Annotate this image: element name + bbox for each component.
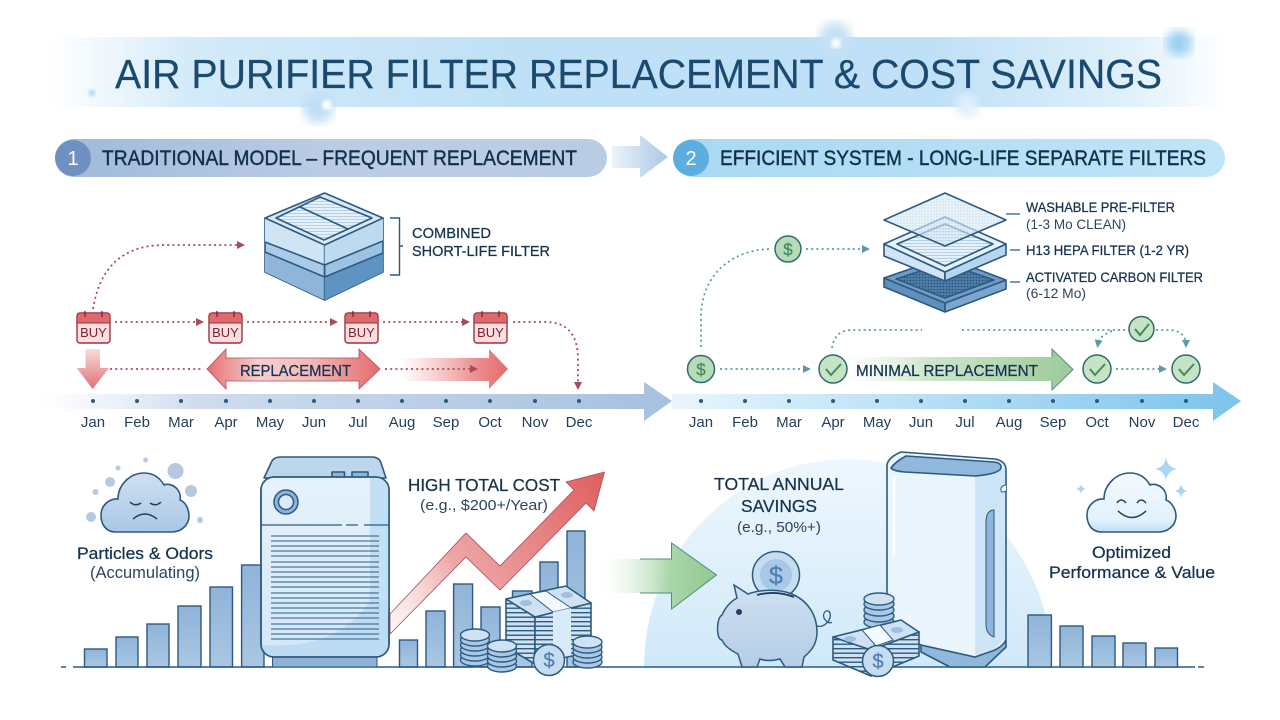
- arrow: down red: [77, 349, 109, 389]
- bar chart: falling cost: [1028, 615, 1178, 667]
- arrow: rising total cost: [390, 472, 604, 634]
- efficient timeline: Nov: [1129, 414, 1156, 431]
- traditional timeline: Feb: [124, 414, 150, 431]
- calendar: buy January: [77, 311, 110, 343]
- traditional timeline: Nov: [522, 414, 549, 431]
- bar chart: rising cost: [400, 531, 585, 667]
- efficient timeline: Feb: [732, 414, 758, 431]
- icon: piggy bank with coin: $: [769, 562, 783, 590]
- arrow: green to savings: [603, 543, 716, 609]
- arrow between headers: [612, 135, 668, 178]
- icon: coin stack and cash small: [833, 593, 919, 676]
- bar chart: rising particles: [84, 565, 264, 667]
- efficient timeline: Jun: [909, 414, 933, 431]
- text: high total cost: HIGH TOTAL COST: [408, 475, 560, 495]
- text: high total cost: [408, 475, 560, 514]
- text: total annual savings: SAVINGS: [741, 496, 817, 516]
- traditional timeline: May: [256, 414, 285, 431]
- icon: separate filter stack: [884, 193, 1006, 312]
- filter layer labels: WASHABLE PRE-FILTER: [1026, 199, 1175, 215]
- traditional timeline: Jan: [81, 414, 105, 431]
- icon: check December: [1172, 355, 1200, 383]
- header: traditional model: 1: [67, 148, 79, 170]
- calendar: buy January: BUY: [80, 325, 107, 340]
- arrow: minimal replacement: [845, 349, 1073, 390]
- arrow: replacement double: [207, 349, 380, 389]
- efficient timeline: Mar: [776, 414, 802, 431]
- efficient timeline: Jan: [689, 414, 713, 431]
- efficient timeline: May: [863, 414, 892, 431]
- icon: modern air purifier: [887, 452, 1006, 667]
- efficient timeline: Aug: [996, 414, 1022, 431]
- calendar: buy October: BUY: [477, 325, 504, 340]
- text: total annual savings: [714, 474, 844, 536]
- title banner: AIR PURIFIER FILTER REPLACEMENT & COST SAVINGS: [115, 51, 1162, 97]
- efficient timeline: Sep: [1040, 414, 1066, 431]
- header: efficient system: [673, 139, 1225, 177]
- text: optimized performance and value: [1049, 543, 1215, 582]
- arrow: fading replacement: [385, 349, 508, 389]
- efficient timeline: Apr: [821, 414, 845, 431]
- efficient timeline: Jul: [955, 414, 975, 431]
- icon: dollar coin large: $: [543, 650, 555, 672]
- arrow: minimal replacement: MINIMAL REPLACEMENT: [856, 363, 1038, 380]
- text: particles and odors: [77, 545, 213, 582]
- traditional timeline: [40, 382, 672, 431]
- icon: sad cloud with particles: [86, 458, 203, 532]
- calendar: buy April: BUY: [212, 325, 239, 340]
- icon: dollar coin large: [534, 644, 564, 676]
- text: total annual savings: TOTAL ANNUAL: [714, 474, 844, 494]
- icon: check October: [1083, 355, 1111, 383]
- traditional timeline: Aug: [389, 414, 415, 431]
- icon: coin stacks: [460, 629, 602, 672]
- icon: check April: [819, 355, 847, 383]
- traditional timeline: Dec: [566, 414, 593, 431]
- icon: piggy bank with coin: [718, 552, 832, 667]
- bracket and label: combined short-life filter: COMBINED: [412, 225, 491, 242]
- icon: happy cloud with sparkles: [1076, 457, 1187, 532]
- icon: dollar coin upper: [775, 236, 801, 262]
- header: efficient system: EFFICIENT SYSTEM - LONG-LIFE SEPARATE FILTERS: [720, 147, 1206, 170]
- header: traditional model: TRADITIONAL MODEL – FREQUENT REPLACEMENT: [102, 147, 577, 170]
- traditional timeline: Oct: [478, 414, 502, 431]
- filter layer labels: ACTIVATED CARBON FILTER: [1026, 269, 1203, 285]
- bracket and label: combined short-life filter: SHORT-LIFE FILTER: [412, 243, 550, 260]
- calendar: buy October: [474, 311, 507, 343]
- text: high total cost: (e.g., $200+/Year): [420, 497, 548, 514]
- traditional timeline: Apr: [214, 414, 238, 431]
- baseline axis: [61, 666, 1204, 668]
- efficient timeline: [672, 382, 1241, 431]
- header: traditional model: [55, 139, 607, 177]
- traditional timeline: Jun: [302, 414, 326, 431]
- icon: dollar coin January: $: [696, 360, 706, 379]
- icon: check upper: [1129, 316, 1154, 342]
- icon: traditional air purifier: [261, 457, 389, 667]
- calendar: buy July: BUY: [348, 325, 375, 340]
- filter layer labels: [1006, 199, 1203, 301]
- header: efficient system: 2: [685, 148, 697, 170]
- savings halo background: [644, 459, 1052, 667]
- icon: dollar coin upper: $: [783, 240, 793, 259]
- traditional timeline: Jul: [348, 414, 368, 431]
- icon: combined filter cube: [265, 193, 383, 300]
- traditional timeline: Mar: [168, 414, 194, 431]
- text: particles and odors: (Accumulating): [90, 564, 200, 582]
- efficient timeline dotted connectors: [701, 249, 1186, 369]
- arrow: replacement double: REPLACEMENT: [240, 363, 351, 380]
- icon: dollar coin January: [688, 356, 714, 382]
- text: optimized performance and value: Performance & Value: [1049, 563, 1215, 582]
- calendar: buy July: [345, 311, 378, 343]
- text: particles and odors: Particles & Odors: [77, 545, 213, 563]
- calendar: buy April: [209, 311, 242, 343]
- filter layer labels: H13 HEPA FILTER (1-2 YR): [1026, 242, 1189, 258]
- bracket and label: combined short-life filter: [390, 218, 550, 275]
- text: optimized performance and value: Optimized: [1092, 543, 1171, 562]
- efficient timeline: Oct: [1085, 414, 1109, 431]
- icon: coin stack and cash small: $: [872, 651, 884, 673]
- filter layer labels: (1-3 Mo CLEAN): [1026, 216, 1126, 232]
- icon: cash stack large: [506, 586, 591, 664]
- traditional timeline dotted connectors: [93, 245, 578, 386]
- efficient timeline: Dec: [1173, 414, 1200, 431]
- title banner: [50, 22, 1230, 123]
- text: total annual savings: (e.g., 50%+): [737, 519, 821, 536]
- traditional timeline: Sep: [433, 414, 459, 431]
- filter layer labels: (6-12 Mo): [1026, 285, 1086, 301]
